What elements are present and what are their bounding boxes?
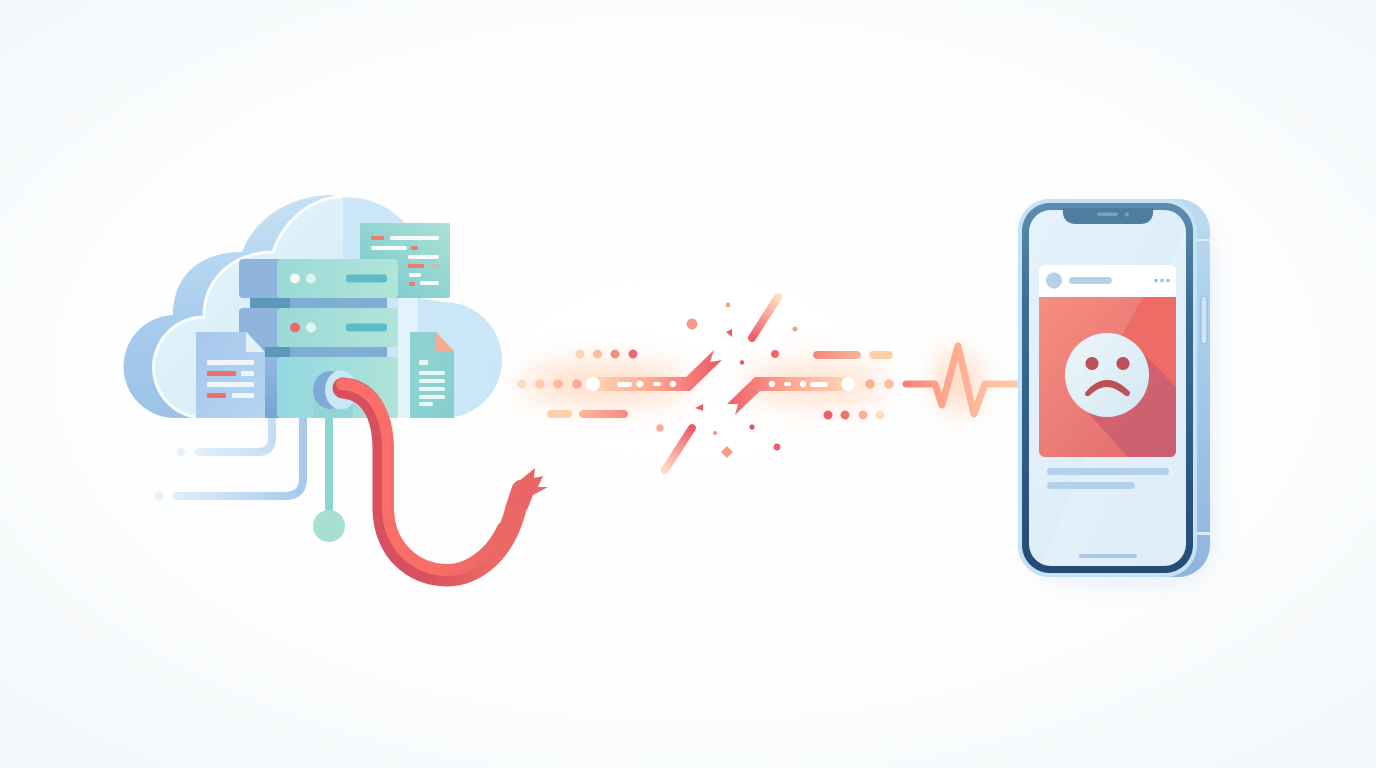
home indicator (1079, 554, 1137, 558)
broken signal right (727, 351, 894, 420)
server stack (239, 259, 398, 418)
heartbeat line (906, 346, 1020, 414)
server unit top (239, 259, 398, 298)
broken signal left (518, 350, 722, 418)
phone bezel (1022, 203, 1193, 573)
severed red cable (342, 384, 548, 576)
glow behind the broken link (520, 352, 980, 412)
signal dots right (813, 351, 894, 420)
failed image panel (1039, 297, 1176, 457)
post card (1039, 265, 1176, 457)
signal dots left (518, 350, 638, 418)
torn pipe left (586, 350, 722, 391)
connector bars (250, 297, 387, 308)
torn pipe right (727, 377, 855, 415)
phone body (1018, 199, 1210, 577)
connector lines below the cloud (154, 412, 345, 542)
document right (410, 332, 454, 418)
phone (1018, 199, 1210, 577)
phone shadow (1030, 220, 1210, 580)
cloud front layer (155, 197, 502, 418)
server unit middle (239, 308, 398, 347)
side button (1201, 296, 1207, 344)
code panel (360, 223, 450, 298)
cloud (120, 190, 508, 420)
post header (1039, 265, 1176, 297)
sad face (1065, 333, 1149, 417)
server unit bottom (265, 357, 398, 418)
cloud back layer (124, 195, 420, 418)
document left (196, 332, 265, 418)
phone screen (1029, 210, 1186, 566)
caption lines (1047, 468, 1169, 489)
port (313, 370, 357, 410)
frayed cable end (506, 468, 548, 510)
notch (1060, 208, 1156, 224)
debris burst (656, 297, 798, 470)
